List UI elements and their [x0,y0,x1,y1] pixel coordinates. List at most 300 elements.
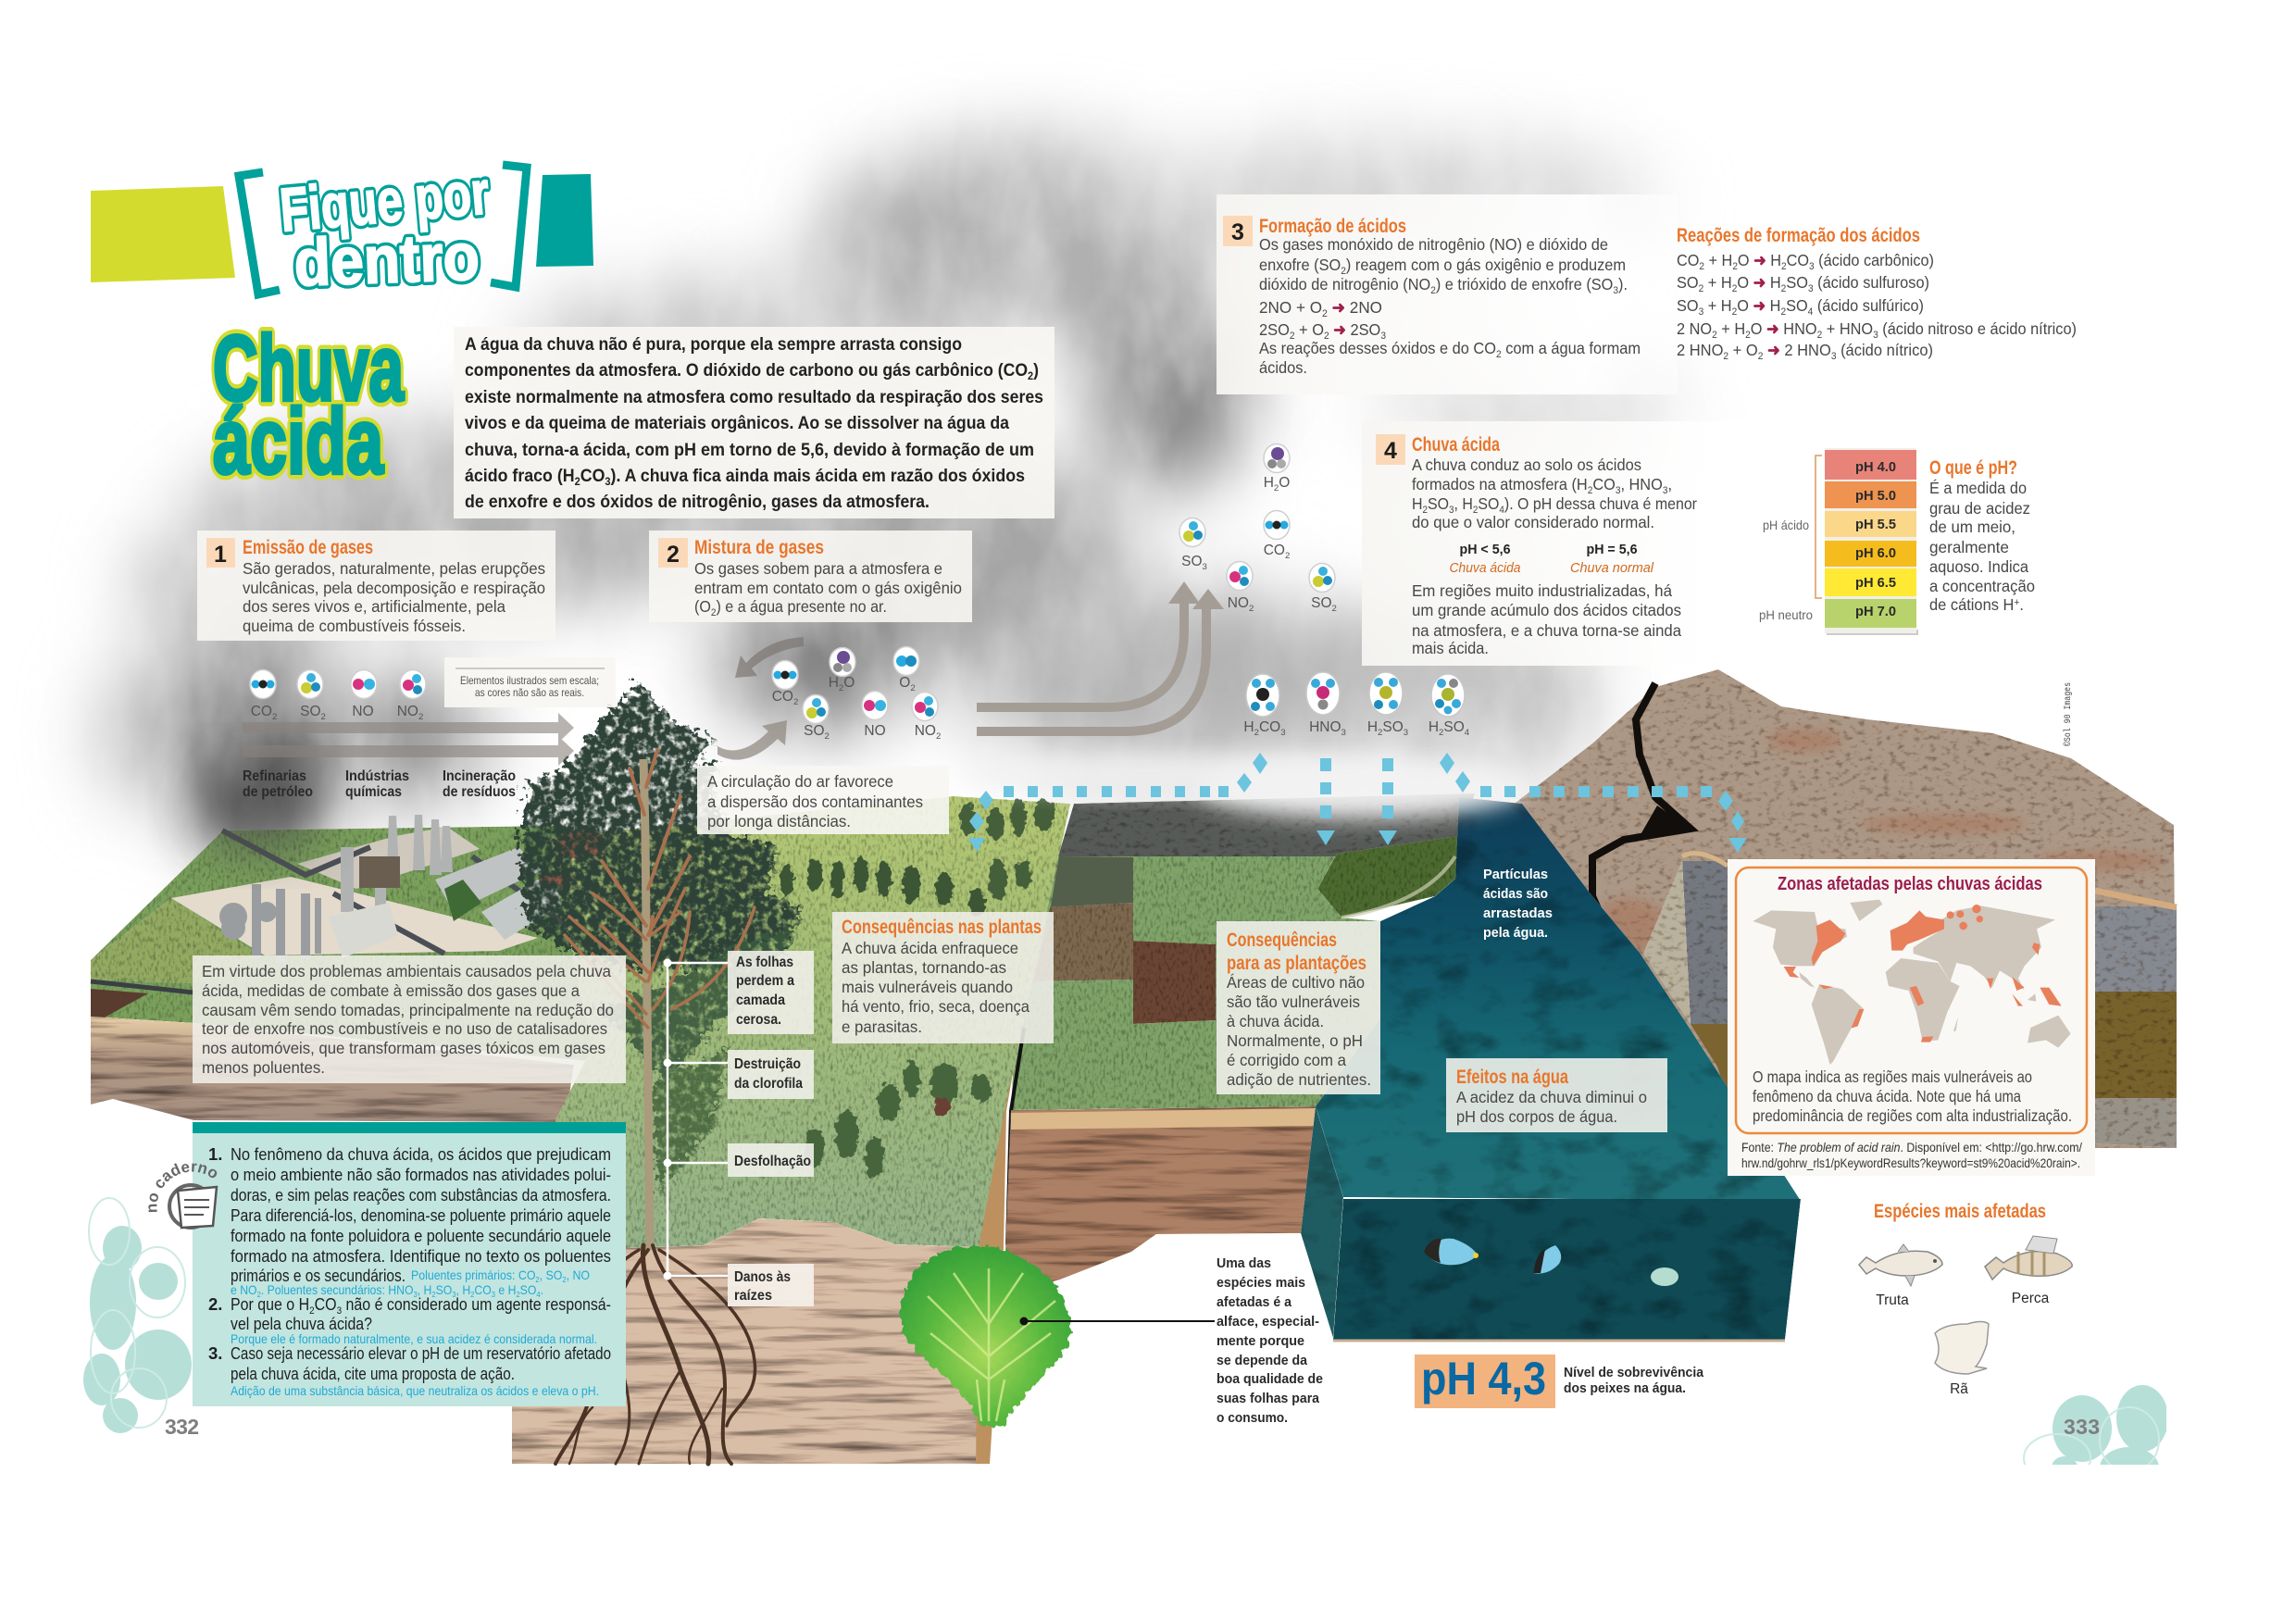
icon: no caderno: no caderno [148,1163,217,1213]
panel 4: chuva ácida: 2 [1423,505,1428,516]
molecules: gas mixture: O [843,675,855,691]
molecules: gas mixture: SO [804,723,825,739]
reactions list: 2 [1758,351,1763,362]
panel: questions, no caderno: Porque ele é formado naturalmente, e sua acidez é considerada normal. [231,1331,597,1346]
panel 4: chuva ácida: pH = 5,6 [1587,542,1637,557]
panel 3: formação de ácidos: + O [1295,320,1324,339]
reactions list: 3 [1699,306,1703,318]
text: lettuce note: alface, especial- [1217,1314,1319,1330]
tree roots [546,1245,755,1464]
landscape: left rock strata [91,1017,574,1122]
panel: world map of affected zones: Fonte: The problem of acid rain. Disponível em: <http://go.hrw.com/ [1741,1140,2082,1155]
reactions list: ➜ H [1753,251,1782,269]
panel: questions, no caderno: SO [520,1282,536,1297]
molecules: acids formed: 2 [1254,728,1259,738]
panel 2: mistura de gases: entram em contato com o gás oxigênio [694,579,962,597]
panel: questions, no caderno: 2 [309,1305,315,1317]
panel: consequências nas plantas: mais vulneráveis quando [842,978,1013,996]
reactions list: (ácido carbônico) [1815,251,1934,269]
label: desfolhação: Desfolhação [734,1154,811,1169]
panel: questions, no caderno: , H [418,1282,431,1297]
panel: questions, no caderno: o meio ambiente não são formados nas atividades polui- [231,1165,611,1184]
panel 3: formação de ácidos: 2SO [1259,320,1292,339]
panel 3: formação de ácidos: enxofre (SO [1259,256,1346,274]
icon: frog [1935,1322,1989,1397]
pH scale: pH 5.5 [1855,517,1896,532]
smoke, front layer and horizon mist [194,620,1528,852]
callout: pH 4,3: Nível de sobrevivência [1564,1365,1704,1380]
arrow: air circulation lower curve [718,720,787,760]
panel 4: chuva ácida [1362,421,1801,666]
panel 3: formação de ácidos: ➜ [1329,320,1350,339]
text: lettuce note: espécies mais [1217,1275,1305,1291]
labels: emission sources: Refinarias [243,768,306,784]
reactions list: O [1751,319,1766,338]
text: o que é pH: grau de acidez [1929,499,2030,518]
text: lettuce note: boa qualidade de [1217,1371,1323,1387]
panel: questions, no caderno: , SO [540,1267,562,1282]
molecules: gas mixture: 2 [839,683,843,693]
label: as folhas perdem a camada cerosa [728,951,814,1034]
intro text panel: ). A chuva fica ainda mais ácida em razão dos óxidos [611,466,1025,486]
panel 2: mistura de gases: ) e a água presente no ar. [716,597,887,616]
reactions list: ➜ [1763,341,1784,359]
reactions list: 2 NO [1677,319,1715,338]
landscape: right rock layers [2095,891,2177,1148]
reactions list: Reações de formação dos ácidos [1677,225,1920,246]
main title [213,317,405,493]
panel 4: chuva ácida: do que o valor considerado normal. [1412,513,1654,531]
lettuce [901,1246,1215,1426]
reactions list: (ácido nitroso e ácido nítrico) [1878,319,2077,338]
panel 4: chuva ácida: 3 [1449,505,1454,516]
intro text panel: 2 [1028,369,1033,382]
molecules: atmosphere gases: 2 [1274,483,1279,493]
panel: air circulation: A circulação do ar favorece [707,772,893,791]
panel: questions, no caderno: e NO [231,1282,261,1297]
molecules: atmosphere gases: 3 [1203,562,1207,572]
landscape: soil layer with wood strip [512,1065,1014,1464]
image credit: ©Sol 90 Images [2063,682,2074,746]
panel 4: chuva ácida: SO [1428,494,1449,513]
molecules: atmosphere gases: NO [1228,595,1249,611]
panel 3: formação de ácidos: ácidos. [1259,358,1307,377]
panel 4: chuva ácida: Em regiões muito industrializadas, há [1412,581,1672,600]
panel: consequências nas plantas [832,912,1054,1043]
reactions list: 2 [1817,330,1822,341]
reactions list: 2 [1699,283,1703,294]
text: partículas ácidas: Partículas [1483,867,1548,882]
panel 3: formação de ácidos: 3 [1613,285,1618,296]
panel 4: chuva ácida: 4 [1499,505,1504,516]
reactions list: (ácido nítrico) [1836,341,1933,359]
panel 4: chuva ácida: , H [1454,494,1473,513]
section title: Fique por [278,157,492,244]
intro text panel: de enxofre e dos óxidos de nitrogênio, gases da atmosfera. [465,492,930,512]
molecules: emitted gases: CO [251,704,272,719]
reactions list: CO [1677,251,1701,269]
panel 2: mistura de gases: (O [694,597,712,616]
panel: consequências para as plantações: Áreas de cultivo não [1227,973,1365,992]
pH scale [1759,448,1918,635]
arrows: gases rising toward the atmosphere [977,581,1224,731]
river and water block [1301,797,1801,1341]
landscape: left plateau [91,826,626,1065]
panel: questions, no caderno: 2 [431,1290,436,1299]
panel 2: mistura de gases: Os gases sobem para a atmosfera e [694,559,942,578]
callout: pH 4,3: dos peixes na água. [1564,1380,1686,1396]
pH scale: pH 6.0 [1855,545,1896,561]
reactions list: 2 HNO [1784,341,1831,359]
reactions list: 3 [1873,330,1878,341]
labels: emission sources: Incineração [443,768,516,784]
panel 1: emissão de gases: vulcânicas, pela decomposição e respiração [243,579,545,597]
panel: questions, no caderno: . [541,1282,543,1297]
panel 3: formação de ácidos: Os gases monóxido de nitrogênio (NO) e dióxido de [1259,235,1608,254]
text: o que é pH: de cátions H [1929,595,2019,614]
panel: consequências para as plantações: é corrigido com a [1227,1051,1346,1069]
intro text panel: chuva, torna-a ácida, com pH em torno de 5,6, devido à formação de um [465,440,1034,460]
reactions list: 3 [1831,351,1836,362]
label: destruição da clorofila [728,1050,814,1099]
panel: questions, no caderno: 3 [337,1305,342,1317]
text: o que é pH: geralmente [1929,538,2009,556]
icon: perch [1985,1236,2072,1306]
panel 3: formação de ácidos: ). [1618,275,1628,293]
panel: measures against emissions: causam vêm sendo tomadas, principalmente na redução do [202,1001,614,1019]
arrow: gases rising from industries (two bands) [243,713,574,766]
panel: questions, no caderno: 2 [470,1290,475,1299]
reactions list: + H [1703,273,1732,292]
panel 4: chuva ácida: formados na atmosfera (H [1412,475,1600,493]
panel 4: chuva ácida: 3 [1663,485,1667,496]
panel 1: emissão de gases: Emissão de gases [243,537,373,558]
red bushes behind the tree [539,830,605,887]
intro text panel: A água da chuva não é pura, porque ela sempre arrasta consigo [465,334,962,355]
panel 4: chuva ácida: um grande acúmulo dos ácidos citados [1412,601,1681,619]
reactions list: + O [1728,341,1758,359]
reactions list: O [1737,296,1753,315]
panel 3: formação de ácidos: 2NO + O [1259,298,1324,317]
molecules: emitted gases: 2 [272,712,277,722]
panel: consequências para as plantações: são tão vulneráveis [1227,993,1360,1011]
panel 3: formação de ácidos: com a água formam [1502,339,1641,357]
text: partículas ácidas: ácidas são [1483,886,1548,902]
dotted blue acid-rain path [968,753,1747,853]
molecules: gas mixture: 2 [910,683,916,693]
molecules: acids formed: SO [1382,719,1404,735]
panel: consequências nas plantas: e parasitas. [842,1017,922,1036]
panel 3: formação de ácidos: 2NO [1350,298,1382,317]
text: lettuce note: o consumo. [1217,1410,1288,1426]
molecules: atmosphere gases: CO [1264,543,1285,558]
molecules: gas mixture: 2 [793,697,798,707]
page number 333: 333 [2064,1415,2100,1439]
label: desfolhação [728,1143,814,1177]
label: as folhas perdem a camada cerosa: As folhas [736,955,793,970]
panel 4: chuva ácida: , HNO [1620,475,1663,493]
panel: questions, no caderno: doras, e sim pelas reações com substâncias da atmosfera. [231,1185,611,1205]
molecules: atmosphere gases: SO [1311,595,1332,611]
molecules: emitted gases: NO [397,704,418,719]
panel: measures against emissions: nos automóveis, que transformam gases tóxicos em gases [202,1039,605,1057]
label: as folhas perdem a camada cerosa: cerosa. [736,1012,781,1028]
icon: trout: Truta [1876,1292,1909,1308]
reactions list: 2 [1732,261,1738,272]
reactions list: ➜ H [1753,273,1782,292]
landscape: middle rock strata [1004,1106,1318,1296]
panel: world map of affected zones: O mapa indica as regiões mais vulneráveis ao [1753,1067,2032,1086]
labels: emission sources: de petróleo [243,784,313,800]
small trees on the hill [780,798,1054,1178]
panel 4: chuva ácida: 3 [1616,485,1620,496]
reactions list: 2 [1699,261,1704,272]
panel: air circulation [697,766,949,834]
molecules: atmosphere gases: 2 [1285,551,1290,561]
text: o que é pH: a concentração [1929,577,2035,595]
panel 1: emissão de gases: 1 [214,542,227,568]
reactions list: O [1738,251,1753,269]
pH scale: pH neutro [1759,607,1813,622]
panel: questions, no caderno: Por que o H [231,1294,322,1314]
text: o que é pH: É a medida do [1929,479,2027,497]
panel 4: chuva ácida: SO [1478,494,1499,513]
panel: world map of affected zones: hrw.nd/gohrw_rls1/pKeywordResults?keyword=st9%20acid%20rain>. [1741,1155,2080,1170]
panel 3: formação de ácidos: ) reagem com o gás oxigênio e produzem [1346,256,1626,274]
reactions list: (ácido sulfuroso) [1814,273,1929,292]
panel 4: chuva ácida: CO [1592,475,1616,493]
molecules: acids formed: 3 [1341,728,1346,738]
panel: questions, no caderno: Poluentes primários: CO [411,1267,552,1282]
reactions list: + HNO [1822,319,1873,338]
molecules: gas mixture: 2 [936,731,941,742]
panel 1: emissão de gases [197,531,555,641]
panel: consequências para as plantações: à chuva ácida. [1227,1012,1324,1030]
panel: questions, no caderno: 3. [208,1343,222,1363]
panel 3: formação de ácidos: ➜ [1328,298,1350,317]
panel 3: formação de ácidos: 3 [1231,219,1244,245]
panel: questions, no caderno: SO [436,1282,452,1297]
molecules: gas mixture: NO [915,723,936,739]
molecules: atmosphere gases: SO [1181,554,1203,569]
molecules: gas mixture: H [829,675,839,691]
molecules: emitted gases: NO [352,704,374,719]
panel 3: formação de ácidos: 3 [1380,331,1386,342]
panel: efeitos na água: pH dos corpos de água. [1456,1107,1617,1126]
landscape: mountain with crack [1500,669,2177,1148]
molecules: atmosphere gases: 2 [1332,604,1337,614]
note: scale disclaimer: Elementos ilustrados sem escala; [460,674,599,687]
panel: measures against emissions: Em virtude dos problemas ambientais causados pela chuva [202,962,611,980]
panel 4: chuva ácida: mais ácida. [1412,639,1489,657]
panel: questions, no caderno: . Poluentes secundários: HNO [261,1282,414,1297]
panel: questions, no caderno: formado na atmosfera. Identifique no texto os poluentes [231,1246,611,1266]
main title: ácida [213,390,384,493]
panel: questions, no caderno [193,1122,626,1406]
panel: air circulation: a dispersão dos contaminantes [707,793,923,811]
pH scale: pH ácido [1763,518,1809,532]
reactions list: O [1737,273,1753,292]
molecules: gas mixture: O [899,675,910,691]
molecules: gas mixture: NO [864,723,886,739]
lettuce pointer [1020,1317,1215,1326]
panel: world map of affected zones [1728,859,2095,1176]
panel: consequências para as plantações: Consequências [1227,930,1337,951]
reactions list: + H [1717,319,1745,338]
factory complex [171,815,593,963]
reactions list: 2 [1723,351,1728,362]
labels: emission sources: de resíduos [443,784,516,800]
pH scale: pH 7.0 [1855,604,1896,619]
reactions list: 2 HNO [1677,341,1726,359]
intro text panel: componentes da atmosfera. O dióxido de carbono ou gás carbônico (CO [465,360,1088,381]
panel: questions, no caderno: 2 [562,1275,567,1284]
species most affected: Espécies mais afetadas [1874,1201,2046,1222]
text: lettuce note: mente porque [1217,1333,1304,1349]
molecules: atmosphere gases: H [1264,475,1274,491]
tree effect connector lines [664,959,728,1280]
panel: questions, no caderno: 3 [452,1290,456,1299]
intro text panel: ácido fraco (H [465,466,585,486]
icon: no caderno [148,1163,218,1230]
panel 2: mistura de gases: Mistura de gases [694,537,824,558]
panel: measures against emissions: teor de enxofre nos combustíveis e no uso de catalisadores [202,1019,607,1038]
labels: emission sources: químicas [345,784,402,800]
labels: emission sources [243,768,516,800]
molecules: acids formed: CO [1259,719,1280,735]
panel 4: chuva ácida: Chuva normal [1570,560,1654,576]
text: lettuce note: afetadas é a [1217,1294,1292,1310]
smoke clouds, back layer [97,139,1685,861]
panel 3: formação de ácidos: 2 [1290,331,1295,342]
text: o que é pH: O que é pH? [1929,457,2017,479]
panel: efeitos na água [1446,1058,1667,1132]
panel: questions, no caderno: 2 [257,1290,261,1299]
reactions list: 2 [1781,283,1786,294]
text: lettuce note: suas folhas para [1217,1391,1320,1406]
panel 4: chuva ácida: H [1412,494,1424,513]
panel: questions, no caderno: vel pela chuva ácida? [231,1314,372,1333]
label: as folhas perdem a camada cerosa: perdem a [736,973,794,989]
panel 1: emissão de gases: São gerados, naturalmente, pelas erupções [243,559,545,578]
panel: questions, no caderno: 4 [536,1290,541,1299]
panel: questions, no caderno: , H [456,1282,470,1297]
panel 3: formação de ácidos [1217,194,1678,394]
panel 3: formação de ácidos: 2 [1341,266,1346,277]
main title: Chuva [213,317,405,420]
panel 4: chuva ácida: 2 [1588,485,1592,496]
section tab: brackets [239,165,527,294]
panel 3: formação de ácidos: 2SO [1350,320,1380,339]
molecules: acids formed: 2 [1439,728,1443,738]
reactions list: SO [1786,296,1808,315]
reactions list: SO [1786,273,1808,292]
panel: questions, no caderno: pela chuva ácida, cite uma proposta de ação. [231,1364,515,1383]
panel 3: formação de ácidos: 2 [1322,308,1328,319]
panel 4: chuva ácida: A chuva conduz ao solo os ácidos [1412,456,1641,474]
panel: consequências nas plantas: Consequências nas plantas [842,917,1042,938]
pH scale: pH 6.5 [1855,575,1896,591]
panel 4: chuva ácida: na atmosfera, e a chuva torna-se ainda [1412,621,1681,640]
label: as folhas perdem a camada cerosa: camada [736,993,785,1008]
text: lettuce note: se depende da [1217,1353,1308,1368]
pH scale: pH 4.0 [1855,459,1896,475]
intro text panel: 3 [605,475,611,488]
landscape: middle fields [1007,793,1475,1245]
arrow: air circulation upper curve [735,637,804,678]
text: o que é pH: de um meio, [1929,518,2015,536]
panel 2: mistura de gases [649,531,972,622]
text: lettuce note: Uma das [1217,1255,1271,1271]
panel 4: chuva ácida: Chuva ácida [1450,560,1520,576]
intro text panel [454,327,1054,518]
panel: efeitos na água: Efeitos na água [1456,1067,1568,1088]
reactions list: 2 [1745,330,1751,341]
decorative teal circles, left [83,1198,192,1433]
panel: questions, no caderno: formado na fonte poluidora e poluente secundário aquele [231,1226,611,1245]
panel: measures against emissions: menos poluentes. [202,1058,325,1077]
reactions list: 3 [1809,261,1815,272]
main title: Chuva [213,317,405,420]
intro text panel: ) [1033,360,1039,381]
panel: consequências nas plantas: A chuva ácida enfraquece [842,939,1018,957]
panel: consequências para as plantações: para as plantações [1227,953,1366,974]
callout: pH 4,3: pH 4,3 [1421,1353,1546,1405]
panel: questions, no caderno: 3 [414,1290,418,1299]
molecules: acids formed: SO [1443,719,1465,735]
panel: consequências para as plantações: adição de nutrientes. [1227,1070,1371,1089]
panel 4: chuva ácida: Chuva ácida [1412,434,1500,456]
panel: questions, no caderno: , NO [567,1267,590,1282]
panel 4: chuva ácida: 2 [1473,505,1478,516]
panel: measures against emissions: ácida, medidas de combate à emissão dos gases que a [202,981,580,1000]
panel: air circulation: por longa distâncias. [707,812,851,830]
molecules: atmosphere gases: 2 [1249,604,1254,614]
panel 3: formação de ácidos: dióxido de nitrogênio (NO [1259,275,1442,293]
label: danos às raízes [728,1264,814,1306]
note: scale disclaimer [444,657,616,707]
fish in the water [1424,1239,1678,1286]
reactions list: SO [1677,273,1700,292]
panel 3: formação de ácidos: Formação de ácidos [1259,216,1406,237]
panel: questions, no caderno: e H [495,1282,516,1297]
panel: measures against emissions [193,955,626,1083]
panel 3: formação de ácidos: 2 [1430,285,1436,296]
panel: world map of affected zones: predominância de regiões com alta industrialização. [1753,1106,2072,1125]
panel: questions, no caderno: CO [474,1282,492,1297]
panel: questions, no caderno: No fenômeno da chuva ácida, os ácidos que prejudicam [231,1144,611,1164]
molecules: acids formed: H [1429,719,1439,735]
pine tree [518,682,801,1250]
species most affected [1859,1201,2072,1397]
panel 4: chuva ácida: ). O pH dessa chuva é menor [1504,494,1697,513]
panel: questions, no caderno: 2 [535,1275,540,1284]
label: danos às raízes: raízes [734,1288,772,1304]
reactions list: ➜ HNO [1766,319,1820,338]
text: partículas ácidas: pela água. [1483,925,1548,941]
panel: consequências para as plantações: Normalmente, o pH [1227,1031,1363,1050]
callout: pH 4,3 [1415,1353,1704,1408]
molecules: emitted gases [250,670,426,722]
reactions list: 2 [1732,283,1737,294]
molecules: emitted gases: 2 [321,712,326,722]
intro text panel: existe normalmente na atmosfera como resultado da respiração dos seres [465,387,1043,407]
molecules: acids formed: 4 [1465,728,1470,738]
text: partículas ácidas: arrastadas [1483,905,1553,921]
reactions list: 2 [1780,306,1786,318]
text: lettuce note [1217,1255,1323,1426]
reactions list: 2 [1732,306,1737,318]
